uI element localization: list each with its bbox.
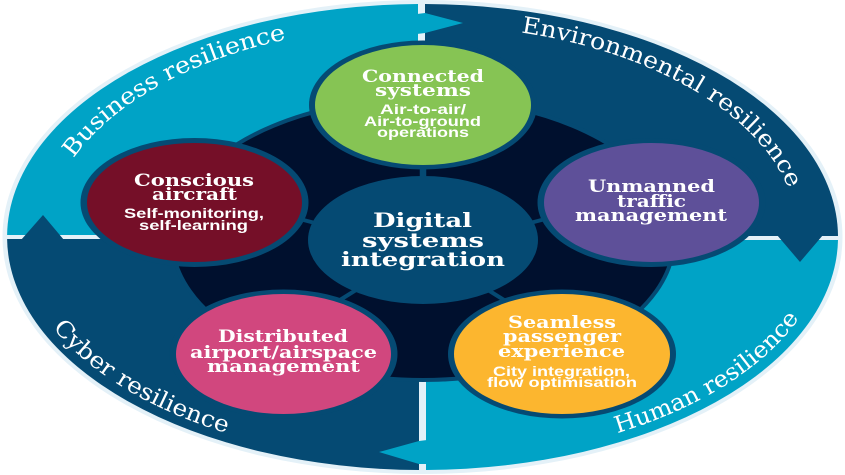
circle: Seamless passenger experience: Seamless [508, 313, 616, 332]
label: Cyber resilience: Cyber resilience [56, 320, 228, 432]
circle: Connected systems: operations [377, 125, 469, 140]
circle: Conscious aircraft: self-learning [139, 218, 248, 233]
circle: Distributed airport/airspace management [170, 290, 398, 418]
circle: Conscious aircraft: Self-monitoring, [124, 206, 264, 221]
circle: Seamless passenger experience: experience [498, 342, 625, 361]
circle: Connected systems: Air-to-air/ [380, 102, 466, 117]
quadrant: business resilience background [7, 4, 418, 235]
circle: Unmanned traffic management: Unmanned [588, 177, 716, 196]
circle: Seamless passenger experience: passenger [503, 327, 621, 346]
circle: Connected systems: systems [375, 81, 471, 100]
circle: Digital systems integration [308, 176, 538, 304]
quadrant: environmental resilience background [425, 4, 838, 236]
circle: Conscious aircraft [80, 138, 308, 267]
arrow: cyber to business [21, 215, 64, 240]
label: Human resilience: Human resilience [613, 314, 797, 433]
circle: Digital systems integration: systems [362, 228, 484, 252]
circle: Unmanned traffic management [538, 138, 766, 267]
circle: Unmanned traffic management: traffic [617, 192, 686, 211]
circle: Seamless passenger experience: flow optimisation [487, 375, 637, 390]
circle: Unmanned traffic management: management [575, 206, 727, 225]
quadrant: human resilience background [426, 240, 838, 470]
circle: Distributed airport/airspace management: Distributed [218, 327, 349, 346]
circle: Distributed airport/airspace management: airport/airspace [190, 343, 377, 362]
circle: Conscious aircraft: Conscious [134, 171, 254, 190]
circle: Digital systems integration: Digital [373, 208, 473, 232]
circle: Digital systems integration: integration [341, 247, 506, 271]
quadrant: cyber resilience background [7, 239, 419, 470]
arrow: environmental to human [777, 235, 823, 262]
circle: Connected systems: Connected [362, 67, 485, 86]
circle: Connected systems: Air-to-ground [364, 114, 481, 129]
label: Environmental resilience: Environmental resilience [522, 16, 798, 186]
inner dark ellipse [172, 98, 674, 380]
circle: Seamless passenger experience [448, 290, 676, 418]
connector spokes [292, 160, 553, 300]
circle: Seamless passenger experience: City integration, [493, 364, 630, 379]
label: Business resilience: Business resilience [61, 28, 284, 158]
circle: Distributed airport/airspace management: management [207, 357, 360, 376]
circle: Connected systems [309, 40, 537, 170]
arrow: human to cyber [379, 440, 427, 464]
arrow: business to environmental [417, 13, 463, 34]
circle: Conscious aircraft: aircraft [152, 185, 237, 204]
